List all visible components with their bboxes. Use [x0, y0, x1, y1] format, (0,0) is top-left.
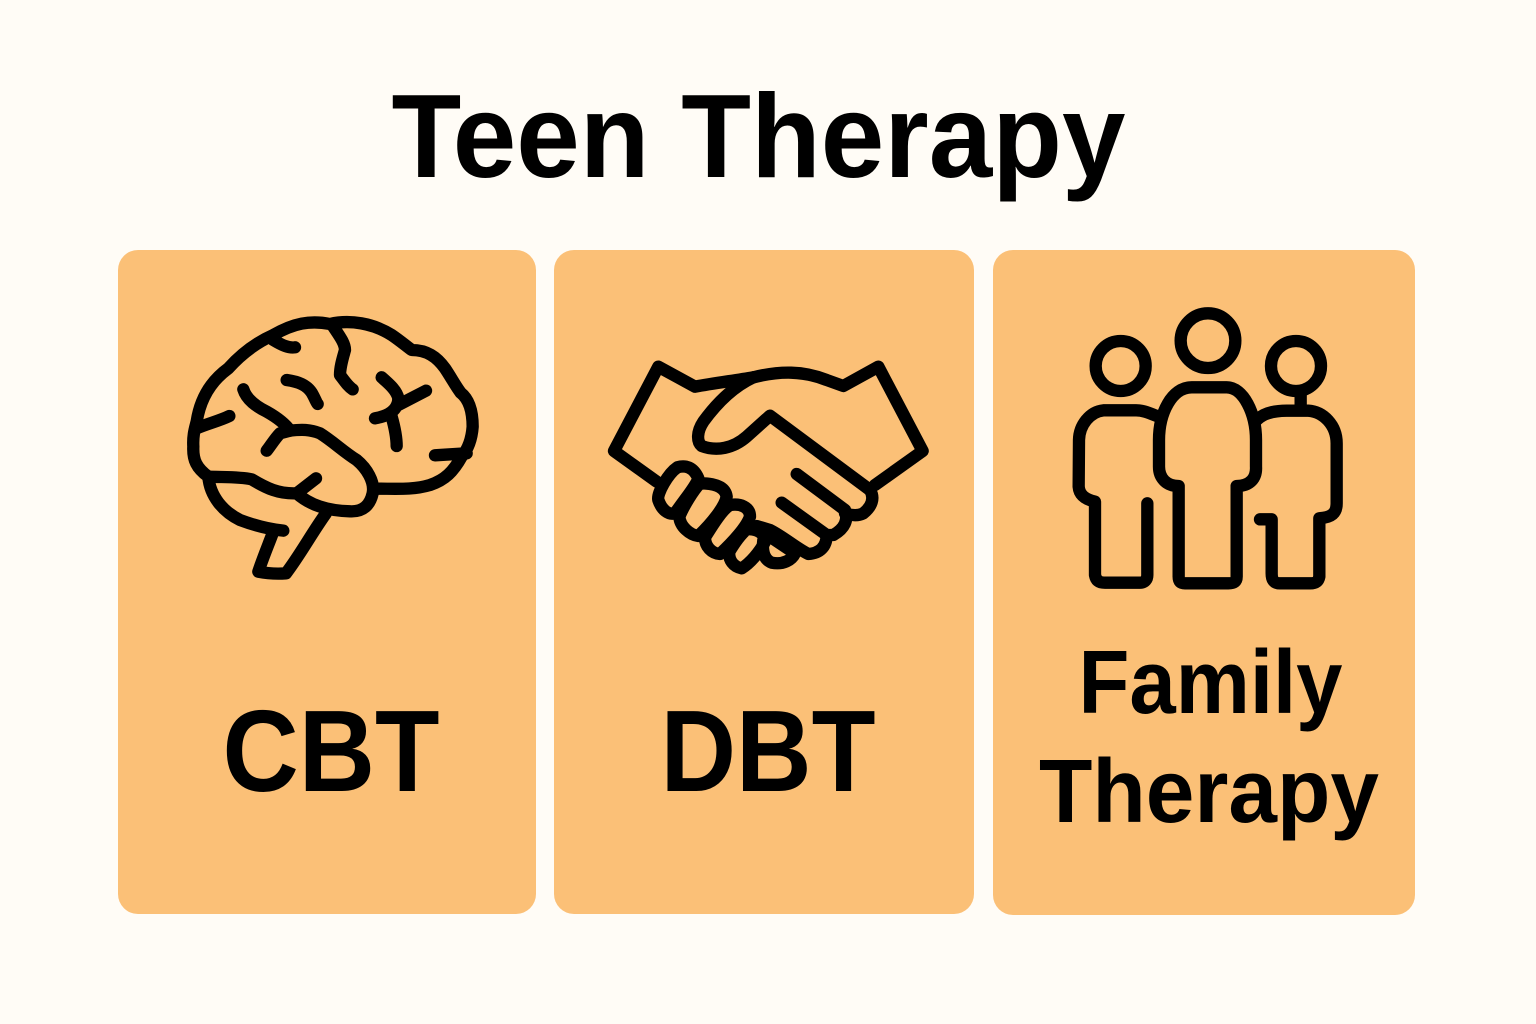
label: CBT: CBT: [222, 686, 440, 816]
icon: brain: [193, 322, 473, 574]
icon: family: [1079, 313, 1337, 583]
panel: DBT: [554, 250, 974, 914]
label: DBT: DBT: [660, 686, 876, 816]
card background: CBT: [118, 250, 536, 914]
card background: DBT: [554, 250, 974, 914]
icon: handshake: [614, 367, 923, 568]
title: Teen Therapy: [392, 70, 1126, 203]
label line: Family: Family: [1078, 633, 1342, 733]
label line: Therapy: Therapy: [1039, 742, 1379, 842]
panel: Family Therapy: [993, 250, 1415, 915]
panel: CBT: [118, 250, 536, 914]
card background: Family Therapy: [993, 250, 1415, 915]
label: Family Therapy: [1039, 633, 1379, 842]
